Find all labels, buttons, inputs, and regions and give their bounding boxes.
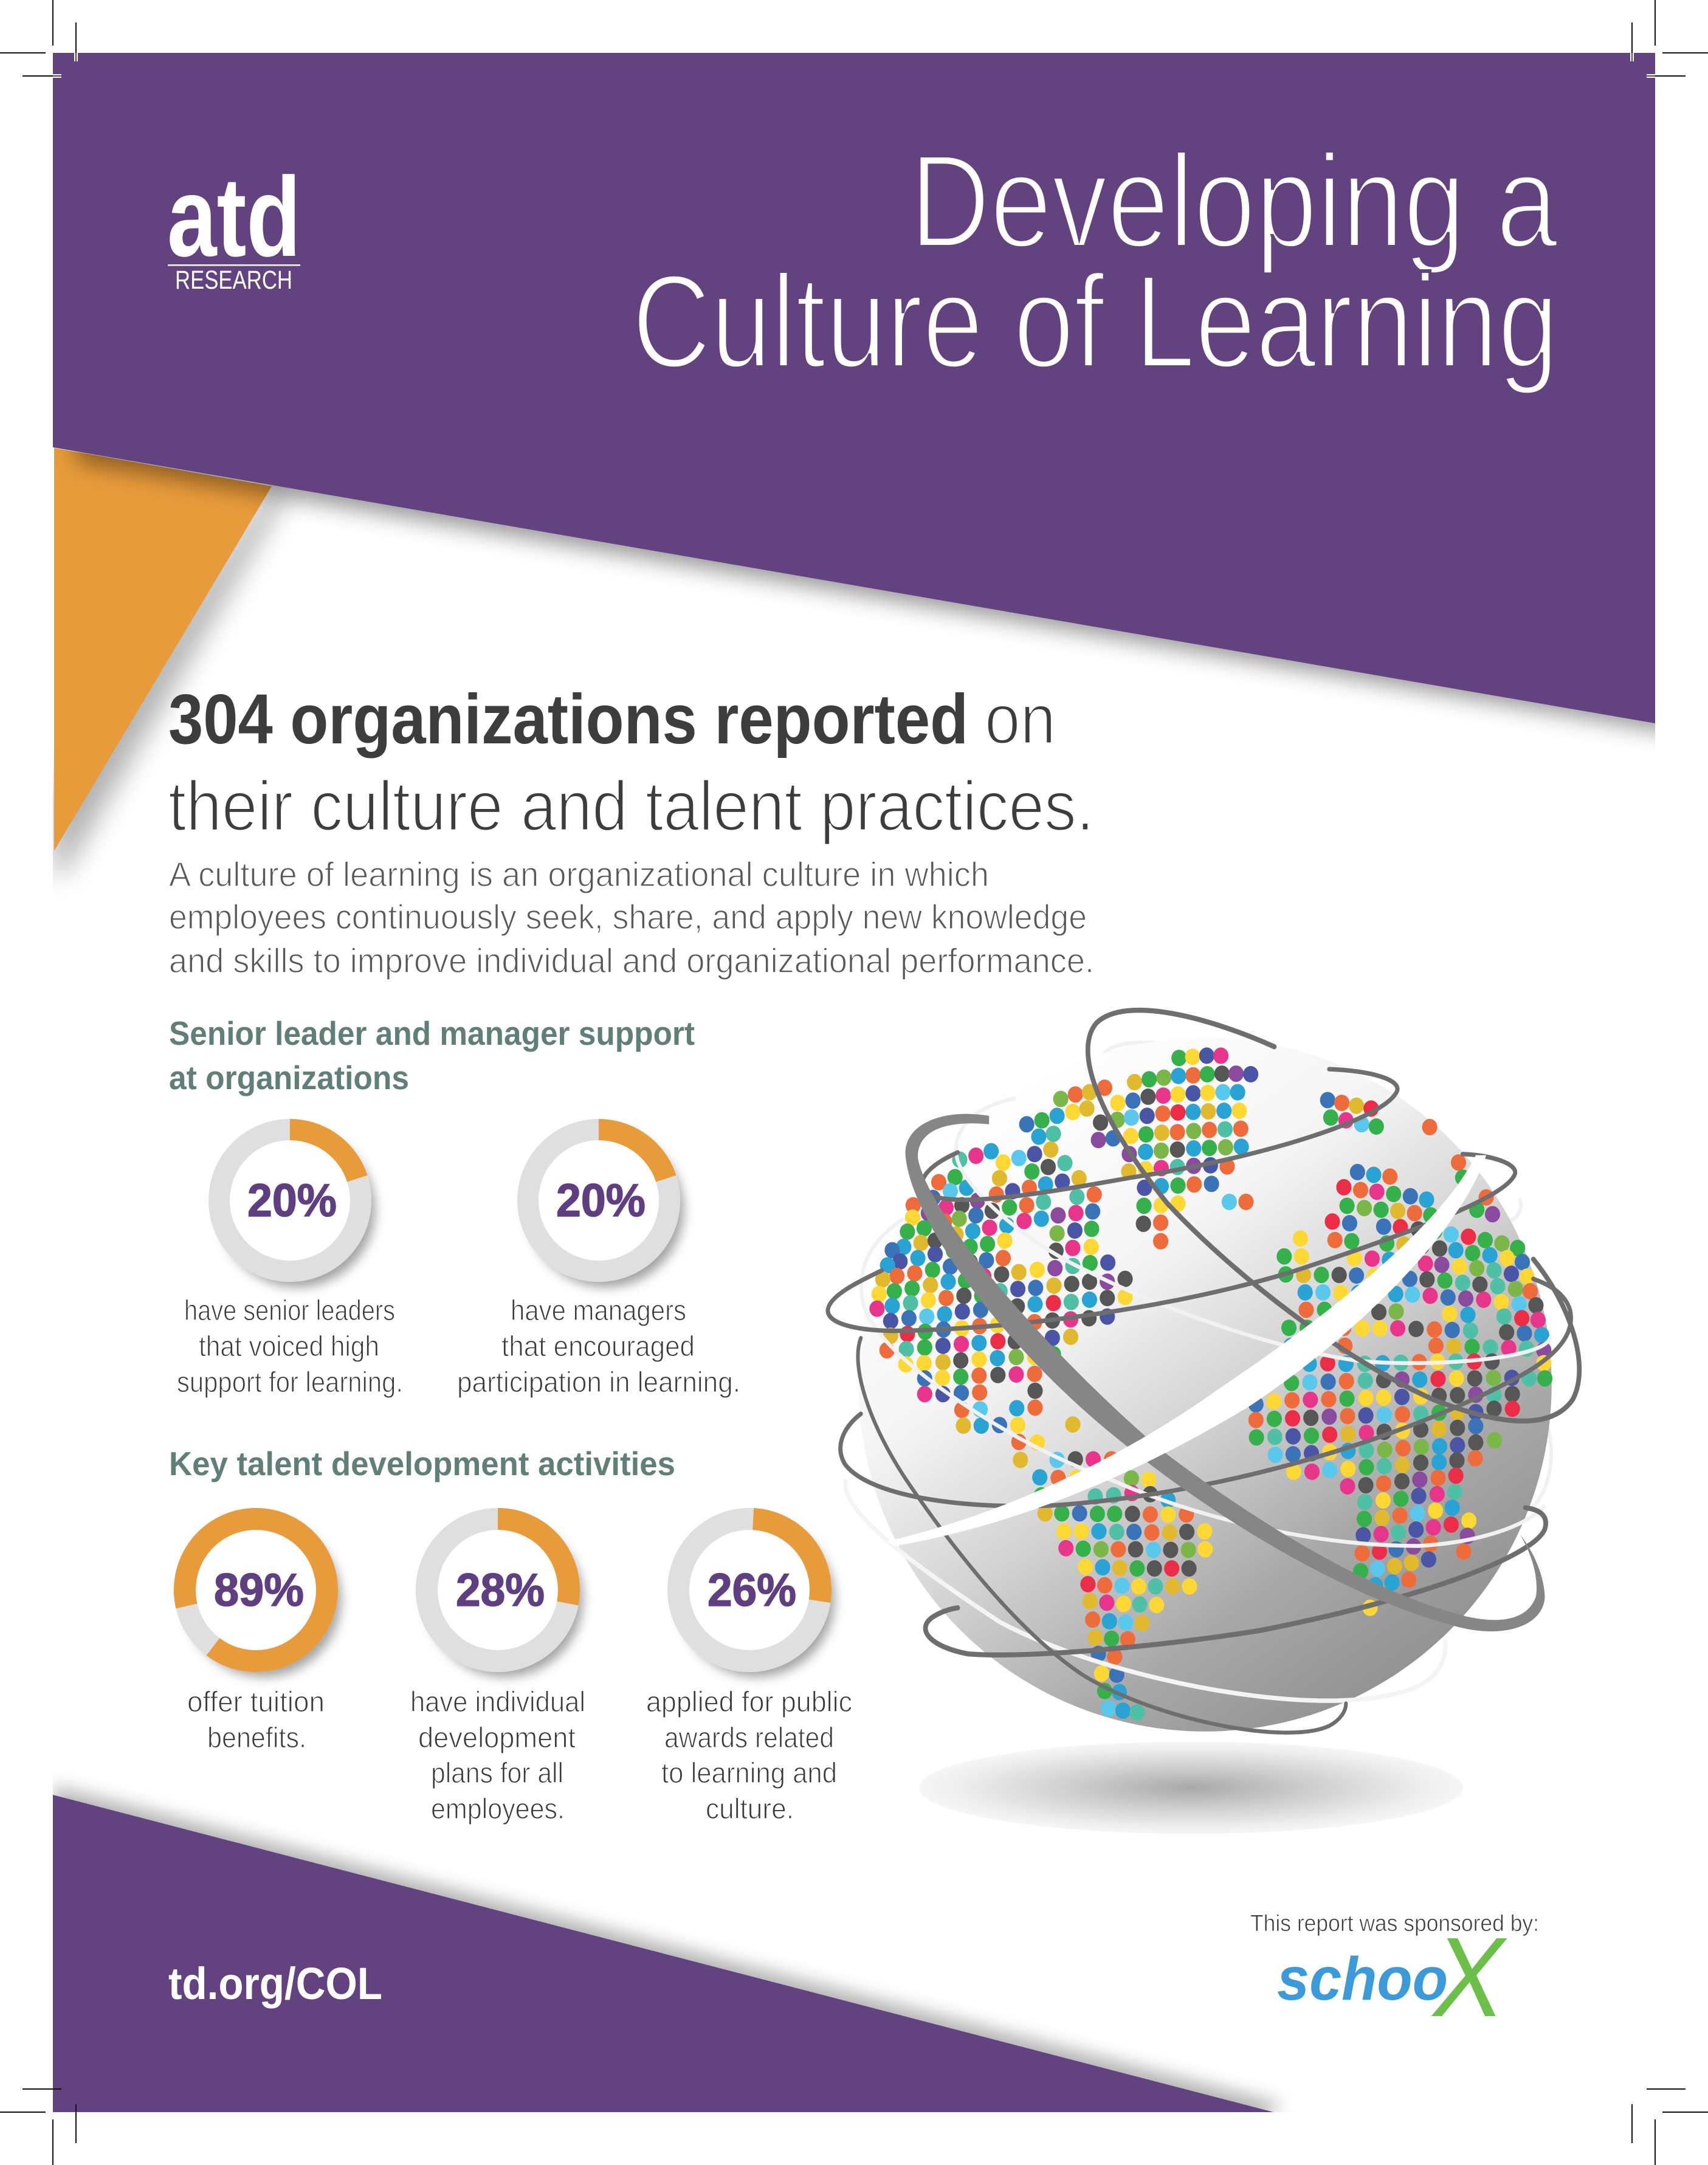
heading: organizations reported [168,680,1094,845]
label: individual development plans: development [418,1721,576,1754]
label: senior leaders [177,1294,403,1398]
label: individual development plans: employees. [431,1792,565,1825]
subheading: senior leader and manager support [169,1014,695,1096]
globe orbit rings [828,1010,1579,1733]
donut: 20% managers [517,1119,684,1287]
subheading: key talent development activities: Key talent development activities [169,1445,675,1482]
label: senior leaders: support for learning. [177,1366,403,1398]
donut: 28% [416,1508,583,1677]
panel: purple footer band [53,1795,1273,2112]
label: managers: that encouraged [501,1330,695,1362]
logo: ATD Research: atd [167,154,301,280]
logo: schoox: schoo [1277,1945,1448,2013]
label: public awards [646,1685,852,1825]
label: managers: have managers [511,1294,686,1326]
band drop shadow [62,449,1655,745]
globe illustration [828,1010,1579,1834]
orange corner triangle [54,448,272,851]
label: public awards: awards related [664,1721,834,1754]
logo: ATD Research: RESEARCH [175,266,292,295]
label: tuition [187,1685,325,1754]
intro paragraph: A culture of learning is an organizational culture in which [169,855,989,894]
footer url: td.org/COL [168,1958,382,2009]
title: Developing a [910,128,1558,275]
label: tuition: benefits. [207,1721,306,1754]
heading: organizations reported: 304 organizations reported [168,680,968,759]
donut: 89%: 89% [214,1564,304,1616]
globe floor shadow [919,1741,1463,1834]
label: public awards: to learning and [661,1757,837,1789]
donut: 28%: 28% [456,1564,545,1616]
donut: 20% managers: 20% [556,1175,646,1227]
label: individual development plans [410,1685,585,1825]
donut: 26%: 26% [708,1564,796,1616]
label: public awards: applied for public [646,1685,852,1718]
label: tuition: offer tuition [187,1685,325,1718]
heading: organizations reported: on [985,680,1056,759]
label: senior leaders: that voiced high [199,1330,379,1362]
intro paragraph: and skills to improve individual and organizational performance. [169,941,1094,980]
logo: schoox: X [1425,1913,1516,2040]
label: managers: participation in learning. [457,1366,740,1398]
triangle drop shadow [53,486,286,875]
label: managers [457,1294,740,1398]
intro paragraph: employees continuously seek, share, and apply new knowledge [169,898,1087,937]
donut: 20% senior leaders: 20% [247,1175,337,1227]
subheading: senior leader and manager support: at organizations [169,1059,409,1096]
panel: purple header band [53,53,1655,723]
heading: organizations reported: their culture and talent practices. [168,766,1094,845]
footer band drop shadow [53,1786,1283,2127]
label: senior leaders: have senior leaders [184,1294,395,1326]
donut: 26% [667,1508,835,1677]
label: individual development plans: plans for all [431,1757,563,1789]
back rings [1103,1042,1551,1507]
title [632,128,1558,396]
donut: 89% [171,1505,341,1677]
sponsor note: This report was sponsored by: [1250,1911,1539,1936]
world map dots [869,1047,1552,1721]
subheading: senior leader and manager support: Senior leader and manager support [169,1014,695,1052]
intro paragraph [169,855,1094,980]
donut: 20% senior leaders [208,1119,375,1287]
label: individual development plans: have individual [410,1685,585,1718]
globe sphere [859,1038,1552,1732]
label: public awards: culture. [706,1792,794,1825]
logo: schoox [1277,1913,1516,2040]
